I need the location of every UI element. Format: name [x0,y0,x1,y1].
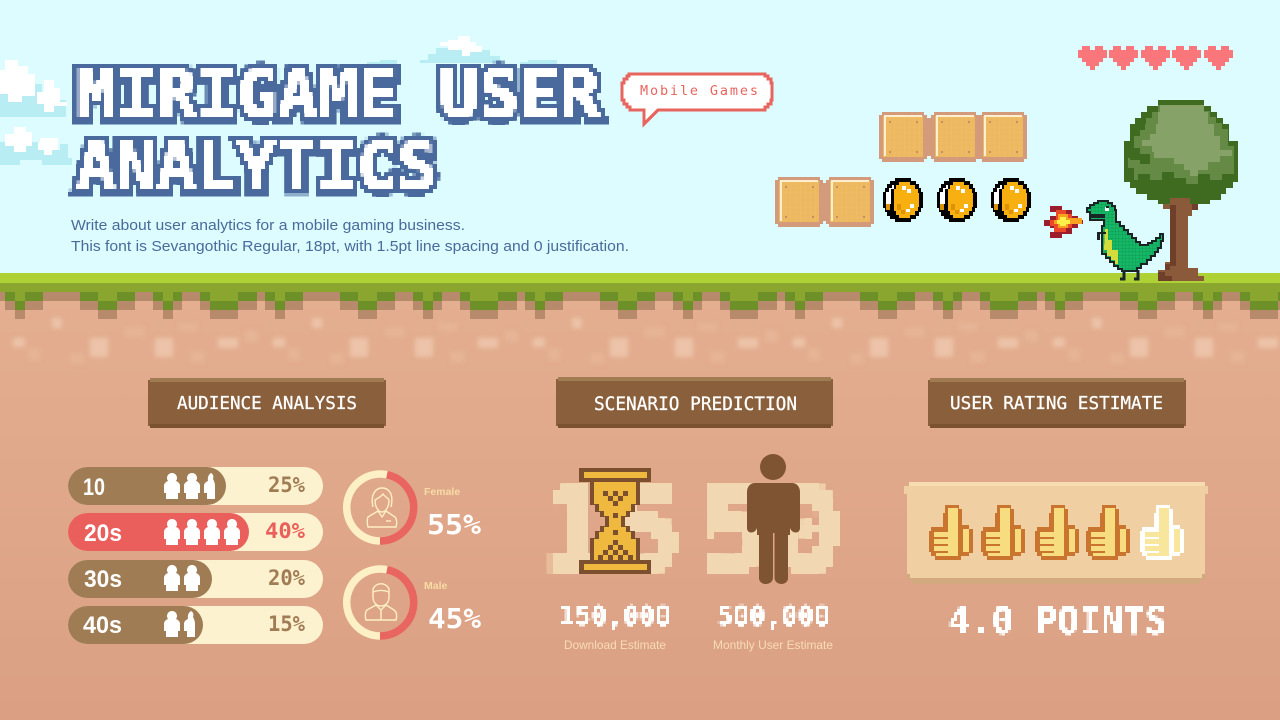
bar: age 20s: 20s [84,520,122,547]
heading: user rating estimate [928,378,1186,428]
heading: scenario prediction: SCENARIO PREDICTION [594,393,797,415]
description text: Write about user analytics for a mobile gaming business. [71,217,465,234]
bar: age 10: 10 [83,474,105,501]
bar: age 30s [68,560,323,598]
speech bubble: Mobile Games [622,74,772,124]
heading: user rating estimate: USER RATING ESTIMATE [950,393,1163,414]
ground: dirt [0,292,1280,720]
panel: audience analysis [68,378,481,644]
stat: monthly users: Monthly User Estimate [713,638,833,652]
icon: man [365,584,397,620]
donut: male 45% [347,569,481,636]
speech bubble: Mobile Games: Mobile Games [640,83,758,99]
donut: male 45%: Male [424,580,448,592]
icon: hourglass [579,468,651,574]
icon: fire breath [1044,206,1083,238]
stat: downloads [559,599,671,652]
icon: thumbs up rating [929,505,1184,560]
stat: downloads: Download Estimate [564,638,666,652]
ground: grass [0,273,1280,320]
title: ANALYTICS [76,128,437,205]
donut: female 55%: 55% [427,508,481,541]
brick blocks [775,112,1027,227]
description text [71,217,629,255]
bar: age 40s: 15% [268,612,305,636]
donut: male 45%: 45% [428,602,481,635]
icon: person [747,454,800,584]
background number: 15: 15 [541,464,683,599]
bar: age 30s: 20% [268,566,305,590]
bar: age 10: 25% [268,473,305,497]
panel: user rating estimate [904,378,1208,643]
background number: 50: 50 [701,464,843,599]
ground: mottled dirt texture [0,315,1280,365]
heading: audience analysis: AUDIENCE ANALYSIS [177,393,357,414]
bar: age 10 [68,467,323,505]
stat: monthly users [713,599,833,652]
icon: woman [367,488,397,527]
bar: age 30s: 30s [84,566,122,593]
sky background [0,0,1280,274]
icon: tree [1124,100,1238,281]
hearts [1078,46,1233,70]
panel: scenario prediction [541,377,843,652]
heading: audience analysis [148,378,386,428]
icon: green dinosaur [1087,201,1163,279]
title [76,56,600,205]
donut: female 55%: Female [424,486,460,498]
donut: female 55% [347,474,481,541]
title: MIRIGAME USER [76,56,600,133]
score text: 4.0 POINTS [948,599,1167,643]
description text: This font is Sevangothic Regular, 18pt, with 1.5pt line spacing and 0 justification. [71,238,629,255]
stat: monthly users: 500,000 [717,599,830,632]
title: ANALYTICS [76,128,437,205]
stat: downloads: 150,000 [559,599,671,632]
heading: scenario prediction [556,377,833,428]
bar: age 40s [68,606,323,644]
bar: age 40s: 40s [83,612,122,639]
title: MIRIGAME USER [76,56,600,133]
clouds [0,36,557,165]
bar: age 20s [68,513,323,551]
coins [883,178,1031,222]
bar: age 20s: 40% [265,519,305,543]
rating card [904,482,1208,584]
